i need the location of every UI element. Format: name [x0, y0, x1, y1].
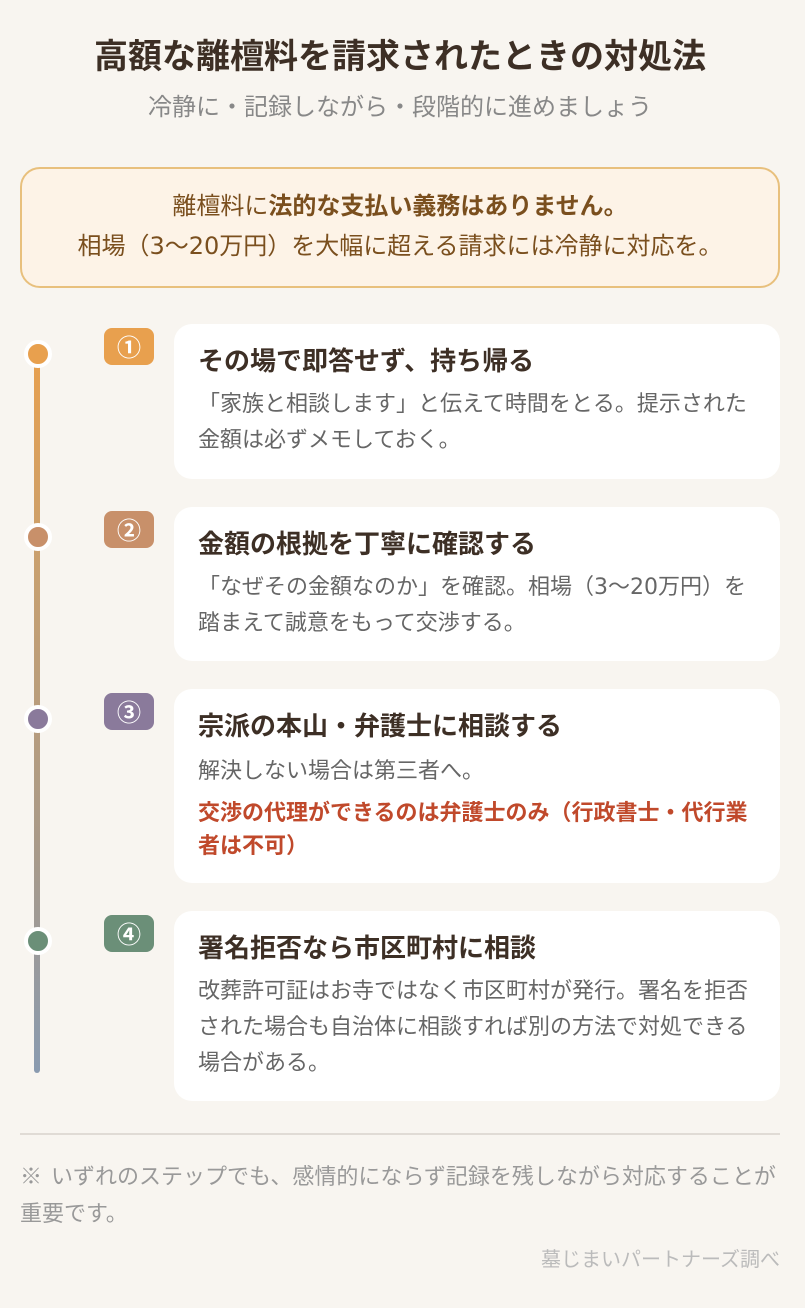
step 3 warning [198, 800, 748, 859]
step 2 body: 「なぜその金額なのか」を確認。相場（3〜20万円）を [198, 575, 746, 600]
footnote [20, 1159, 776, 1227]
step card 4 [174, 911, 780, 1101]
step 1 body: 「家族と相談します」と伝えて時間をとる。提示された [198, 392, 747, 417]
step 3 body: 解決しない場合は第三者へ。 [198, 759, 484, 784]
step 4 body: 場合がある。 [198, 1051, 330, 1076]
step 2 body [198, 575, 746, 636]
step 3 heading: 宗派の本山・弁護士に相談する [198, 712, 562, 742]
step 3 warning: 者は不可） [198, 834, 308, 859]
badge 1: ① [117, 328, 141, 363]
dot 3 [24, 705, 52, 733]
source: 墓じまいパートナーズ調べ [541, 1247, 780, 1271]
callout [20, 167, 780, 288]
badge 4: ④ [117, 915, 141, 950]
step 2 heading: 金額の根拠を丁寧に確認する [198, 530, 536, 560]
step 4 body: された場合も自治体に相談すれば別の方法で対処できる [198, 1015, 748, 1040]
step 4 heading: 署名拒否なら市区町村に相談 [198, 934, 536, 964]
callout: 相場（3〜20万円）を大幅に超える請求には冷静に対応を。 [77, 232, 723, 260]
step 3 warning: 交渉の代理ができるのは弁護士のみ（行政書士・代行業 [198, 801, 748, 826]
dot 4 [24, 927, 52, 955]
footnote: ※ いずれのステップでも、感情的にならず記録を残しながら対応することが [20, 1159, 776, 1191]
step card 1 [174, 324, 780, 479]
footnote: 重要です。 [20, 1202, 128, 1227]
step card 3 [174, 689, 780, 883]
step 1 body: 金額は必ずメモしておく。 [198, 428, 461, 453]
dot 2 [24, 523, 52, 551]
title: 高額な離檀料を請求されたときの対処法 [94, 37, 706, 77]
step 4 body: 改葬許可証はお寺ではなく市区町村が発行。署名を拒否 [198, 979, 748, 1004]
callout: 離檀料に法的な支払い義務はありません。 [172, 192, 628, 220]
timeline line [34, 354, 40, 1073]
badge 4 [104, 915, 154, 952]
step 2 body: 踏まえて誠意をもって交渉する。 [198, 611, 526, 636]
step 1 body [198, 392, 747, 453]
step card 2 [174, 507, 780, 661]
badge 2: ② [117, 511, 141, 546]
badge 3: ③ [117, 693, 141, 728]
step 4 body [198, 979, 748, 1076]
step 1 heading: その場で即答せず、持ち帰る [198, 347, 534, 377]
badge 3 [104, 693, 154, 730]
dot 1 [24, 340, 52, 368]
badge 2 [104, 511, 154, 548]
subtitle: 冷静に・記録しながら・段階的に進めましょう [148, 93, 652, 121]
badge 1 [104, 328, 154, 365]
